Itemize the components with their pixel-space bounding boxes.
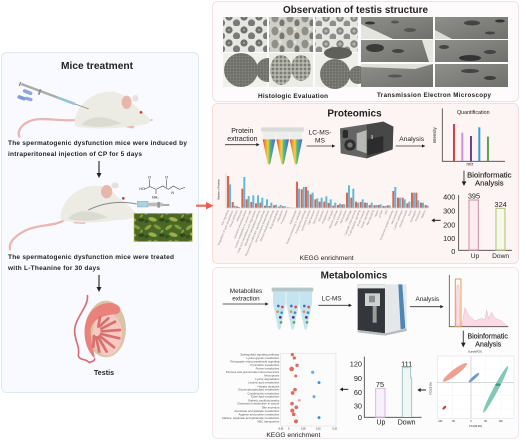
- step: LC-MS: [318, 295, 352, 307]
- text: induction description: The spermatogenic dysfunction mice were induced by: [8, 140, 187, 147]
- chart: KEGG enrichment bars: Lysosome function: [300, 209, 312, 231]
- chart: KEGG enrichment dots: -0.05: [278, 428, 284, 430]
- icon: syringe: [19, 82, 89, 109]
- step: LC-MS: LC-MS: [322, 295, 342, 302]
- chart: up and down proteins: 0: [451, 247, 455, 256]
- mouse with CP injection: [17, 82, 153, 137]
- step: LC-MS-MS: LC-MS-: [309, 129, 331, 136]
- chart: KEGG enrichment bars: Glutathione metabolism pathway: [243, 209, 262, 247]
- caption: histologic evaluation: Histologic Evaluation: [258, 93, 328, 100]
- step: analysis: Analysis: [399, 136, 425, 143]
- chart: KEGG enrichment dots: Cholesterol metabolism in cancer: [237, 402, 279, 406]
- heading: mice treatment: Mice treatment: [61, 61, 134, 72]
- chart: chromatogram: [449, 275, 508, 327]
- chart: KEGG enrichment bars: Focal adhesion: [228, 209, 239, 228]
- chart: up and down metabolites: 90: [354, 374, 362, 383]
- chart: KEGG enrichment bars: Oxidative phosphorylation: [232, 209, 248, 239]
- chart: KEGG enrichment bars: Endocytosis pathway: [294, 209, 307, 234]
- chart: KEGG enrichment dots: 0.05: [301, 428, 306, 430]
- chart: quantification: Quantification: [457, 110, 490, 116]
- chart: KEGG enrichment bars: Ras signaling: [220, 209, 230, 226]
- arrow and label: bioinformatic analysis: Analysis: [475, 342, 502, 349]
- icon: testis: [75, 295, 126, 363]
- chart: PCA scores: -100: [438, 421, 443, 423]
- chart: KEGG enrichment bars: Ribosome: [235, 209, 243, 222]
- chart: PCA scores: 50: [484, 421, 488, 423]
- arrow: to testis: [96, 275, 102, 292]
- chart: up and down metabolites: Down: [398, 420, 416, 427]
- chart: KEGG enrichment bars: Necroptosis: [339, 209, 348, 224]
- chart: KEGG enrichment bars: Mitophagy: [344, 209, 352, 222]
- chart: KEGG enrichment dots: Pentose and glucuronate interconversions: [226, 370, 280, 374]
- step: protein extraction: Protein: [231, 128, 254, 135]
- chart: KEGG enrichment bars: Tight junction: [306, 209, 316, 226]
- chart: KEGG enrichment bars: [216, 173, 429, 257]
- chart: KEGG enrichment bars: Prion: [407, 209, 413, 217]
- icon: gavage syringe: [137, 201, 169, 208]
- step: metabolites extraction: Metabolites: [230, 288, 262, 295]
- chart: up and down proteins: 400: [443, 192, 455, 201]
- chart: KEGG enrichment dots: Hepatic steatosis: [258, 384, 280, 388]
- chart: up and down proteins: Up: [471, 253, 480, 260]
- chart: quantification: [432, 108, 505, 166]
- workflow: metabolomics results: [222, 331, 514, 439]
- text: treatment description: with L-Theanine for 30 days: [7, 265, 100, 272]
- chart: KEGG enrichment bars: Notch: [373, 209, 380, 217]
- images: transmission electron microscopy: [361, 17, 508, 87]
- chart: KEGG enrichment bars: Proteasome: [280, 209, 289, 224]
- heading: observation: Observation of testis structure: [283, 5, 428, 16]
- chart: KEGG enrichment bars: Phagosome: [321, 209, 330, 224]
- chart: KEGG enrichment dots: Pyrimidine metabolism: [251, 363, 280, 367]
- chart: KEGG enrichment bars: Fatty acid metabolism and degradation: [236, 209, 257, 253]
- step: LC-MS-MS: MS: [315, 137, 326, 144]
- chart: KEGG enrichment dots: Bile secretion: [262, 405, 280, 409]
- label: KEGG enrichment: KEGG enrichment: [300, 255, 354, 262]
- images: histologic evaluation: [223, 17, 367, 89]
- chart: KEGG enrichment dots: Retrograde endocannabinoid signaling: [230, 359, 280, 363]
- chart: quantification: m/z: [466, 161, 473, 166]
- step: LC-MS-MS: [307, 129, 335, 148]
- chart: up and down metabolites: 60: [354, 388, 362, 397]
- step: metabolites extraction: extraction: [232, 295, 260, 302]
- chart: up and down metabolites: Up: [377, 420, 386, 427]
- chart: KEGG enrichment bars: Drug metabolism: [268, 209, 280, 230]
- mouse with L-Theanine gavage: [10, 175, 192, 249]
- chart: KEGG enrichment dots: Diabetic cardiomyopathy: [248, 398, 280, 402]
- icon: pills: [17, 89, 33, 102]
- chart: up and down metabolites: 120: [350, 360, 362, 369]
- chart: KEGG enrichment bars: Number of Proteins: [217, 178, 220, 199]
- icon: L-theanine molecule: N: [171, 191, 174, 195]
- chart: KEGG enrichment bars: Meiosis pathway: [328, 209, 339, 229]
- chart: KEGG enrichment dots: Lysine degradation: [255, 377, 280, 381]
- chart: up and down metabolites: 75: [376, 380, 384, 389]
- arrow: to gavage: [96, 161, 102, 178]
- workflow: proteomics results: [216, 170, 512, 262]
- chart: KEGG enrichment bars: Carbon metabolism in cancer cells: [233, 209, 253, 249]
- icon: rainbow tubes: [261, 127, 304, 164]
- step: analysis: [396, 136, 425, 148]
- chart: KEGG enrichment bars: Endocrine system pathway: [379, 209, 394, 240]
- chart: KEGG enrichment bars: Cytosolic DNA sensing: [343, 209, 357, 236]
- chart: KEGG enrichment bars: Protein processing in reticulum: [285, 209, 303, 245]
- chart: KEGG enrichment bars: Gap junction: [390, 209, 399, 225]
- icon: metabolite tubes: [272, 288, 313, 330]
- arrow and label: bioinformatic analysis: [461, 331, 508, 349]
- chart: up and down proteins: Down: [492, 253, 509, 260]
- chart: up and down proteins: 200: [443, 221, 455, 230]
- chart: KEGG enrichment dots: 0: [288, 428, 290, 430]
- chart: KEGG enrichment bars: Cell cycle: [326, 209, 334, 222]
- chart: up and down proteins: 324: [495, 200, 507, 209]
- label: KEGG enrichment: KEGG enrichment: [266, 432, 320, 439]
- chart: up and down proteins: [443, 192, 512, 260]
- chart: KEGG enrichment dots: Ascorbate and aldarate metabolism: [234, 409, 280, 413]
- chart: KEGG enrichment bars: Parkinson: [414, 209, 422, 222]
- chart: quantification: Intensity: [432, 126, 437, 143]
- chart: KEGG enrichment bars: Huntington: [409, 209, 417, 223]
- icon: L-theanine molecule: NH₂: [152, 195, 159, 199]
- chart: PCA scores: Scores(PCA): [468, 351, 482, 354]
- chart: KEGG enrichment dots: Lysine-glycan metabolism: [247, 356, 280, 360]
- caption: transmission electron microscopy: Transmission Electron Microscopy: [377, 92, 492, 99]
- chart: PCA scores: [430, 351, 514, 428]
- chart: PCA scores: PC1(32.0%): [469, 426, 482, 428]
- chart: KEGG enrichment dots: Sphingolipid signaling pathway: [240, 352, 280, 356]
- chart: up and down proteins: 395: [468, 192, 480, 201]
- icon: L-theanine molecule: HO: [139, 187, 145, 191]
- chart: KEGG enrichment dots: Purine metabolism: [256, 367, 280, 371]
- chart: up and down metabolites: [350, 357, 422, 427]
- arrow and label: bioinformatic analysis: Analysis: [475, 179, 504, 188]
- step: protein extraction: [225, 128, 260, 146]
- chart: up and down metabolites: 0: [358, 413, 362, 422]
- chart: up and down metabolites: 111: [401, 359, 412, 368]
- chart: KEGG enrichment dots: Linoleic acid metabolism: [248, 381, 280, 385]
- chart: KEGG enrichment dots: [222, 352, 338, 430]
- chart: KEGG enrichment bars: Steroid hormone biosynthesis: [253, 209, 271, 243]
- arrow: treatment to omics: [196, 202, 214, 209]
- chart: KEGG enrichment dots: Cysathionine metabolism: [247, 391, 280, 395]
- heading: metabolomics: Metabolomics: [321, 271, 388, 282]
- label: testis: Testis: [94, 370, 114, 377]
- chart: up and down proteins: 100: [443, 234, 455, 243]
- chart: KEGG enrichment bars: mTOR: [377, 209, 384, 218]
- chart: KEGG enrichment bars: Retinol metabolism pathway: [259, 209, 275, 242]
- panel: mice treatment: [2, 52, 198, 392]
- icon: LC-MS instrument: [358, 284, 407, 336]
- chart: KEGG enrichment dots: ABC transporters: [257, 419, 280, 423]
- chart: KEGG enrichment bars: Glycolysis: [276, 209, 284, 222]
- arrow and label: bioinformatic analysis: Bioinformatic: [467, 333, 508, 340]
- step: analysis: Analysis: [416, 296, 439, 303]
- chart: up and down proteins: 300: [443, 206, 455, 215]
- icon: L-theanine molecule: O: [148, 175, 151, 180]
- chart: KEGG enrichment dots: 0.15: [332, 428, 338, 430]
- chart: KEGG enrichment bars: Cardiac muscle: [398, 209, 408, 228]
- workflow: proteomics sample to quantification: [225, 108, 505, 166]
- arrow: to KEGG: [431, 218, 441, 222]
- chart: KEGG enrichment dots: Alanine, aspartate and glutamate metabolism: [222, 416, 280, 420]
- chart: KEGG enrichment bars: B cell receptor: [356, 209, 366, 227]
- heading: proteomics: Proteomics: [327, 109, 382, 120]
- chart: KEGG enrichment dots: Necroptosis: [264, 374, 280, 378]
- chart: KEGG enrichment bars: Malaria: [420, 209, 427, 219]
- chart: KEGG enrichment bars: T cell receptor signaling: [347, 209, 361, 237]
- icon: L-theanine molecule: [139, 175, 185, 199]
- step: analysis: [410, 296, 444, 308]
- chart: KEGG enrichment bars: Insulin signaling: [359, 209, 370, 229]
- chart: KEGG enrichment bars: Wnt signaling: [365, 209, 375, 226]
- arrow and label: bioinformatic analysis: [462, 170, 512, 188]
- photo: tea leaves: [134, 213, 192, 242]
- chart: KEGG enrichment dots: Glycerophospholipid metabolism: [238, 388, 280, 392]
- chart: KEGG enrichment bars: Cancer pathways: [392, 209, 404, 230]
- text: induction description: [8, 140, 187, 158]
- chart: PCA scores: 0: [470, 421, 472, 423]
- panel: metabolomics: [212, 268, 518, 439]
- icon: L-theanine molecule: O: [165, 175, 168, 180]
- step: protein extraction: extraction: [227, 136, 258, 143]
- step: metabolites extraction: [223, 288, 269, 306]
- text: treatment description: The spermatogenic dysfunction mice were treated: [8, 254, 174, 261]
- chart: KEGG enrichment dots: Ether lipid metabolism: [251, 395, 280, 399]
- chart: KEGG enrichment bars: p53: [383, 209, 389, 215]
- arrow and label: bioinformatic analysis: Bioinformatic: [467, 170, 512, 179]
- workflow: metabolomics sample to spectrum: [223, 271, 508, 336]
- chart: KEGG enrichment bars: Spliceosome: [288, 209, 298, 225]
- icon: mass spectrometer: [340, 122, 393, 158]
- arrow: PCA to bars: [417, 388, 426, 392]
- panel: observation of testis structure: [212, 2, 518, 102]
- text: induction description: intraperitoneal injection of CP for 5 days: [8, 151, 142, 158]
- chart: KEGG enrichment bars: Peroxisome proliferator signaling pathway: [244, 209, 266, 257]
- chart: KEGG enrichment bars: Gap junction: [311, 209, 321, 225]
- chart: PCA scores: PC2(18.3%): [430, 382, 432, 395]
- arrow: bars to KEGG: [340, 387, 348, 391]
- chart: KEGG enrichment dots: Arginine and proline metabolism: [238, 412, 280, 416]
- chart: KEGG enrichment bars: RNA transport: [333, 209, 343, 227]
- chart: PCA scores: 100: [499, 421, 503, 423]
- chart: PCA scores: -50: [452, 421, 456, 423]
- panel: proteomics: [212, 104, 518, 264]
- text: treatment description: [7, 254, 174, 272]
- chart: up and down metabolites: 30: [354, 402, 362, 411]
- chart: KEGG enrichment dots: 0.10: [316, 428, 321, 430]
- chart: KEGG enrichment bars: Regulation of actin cytoskeleton: [216, 209, 234, 246]
- chart: KEGG enrichment bars: Apoptosis: [317, 209, 325, 222]
